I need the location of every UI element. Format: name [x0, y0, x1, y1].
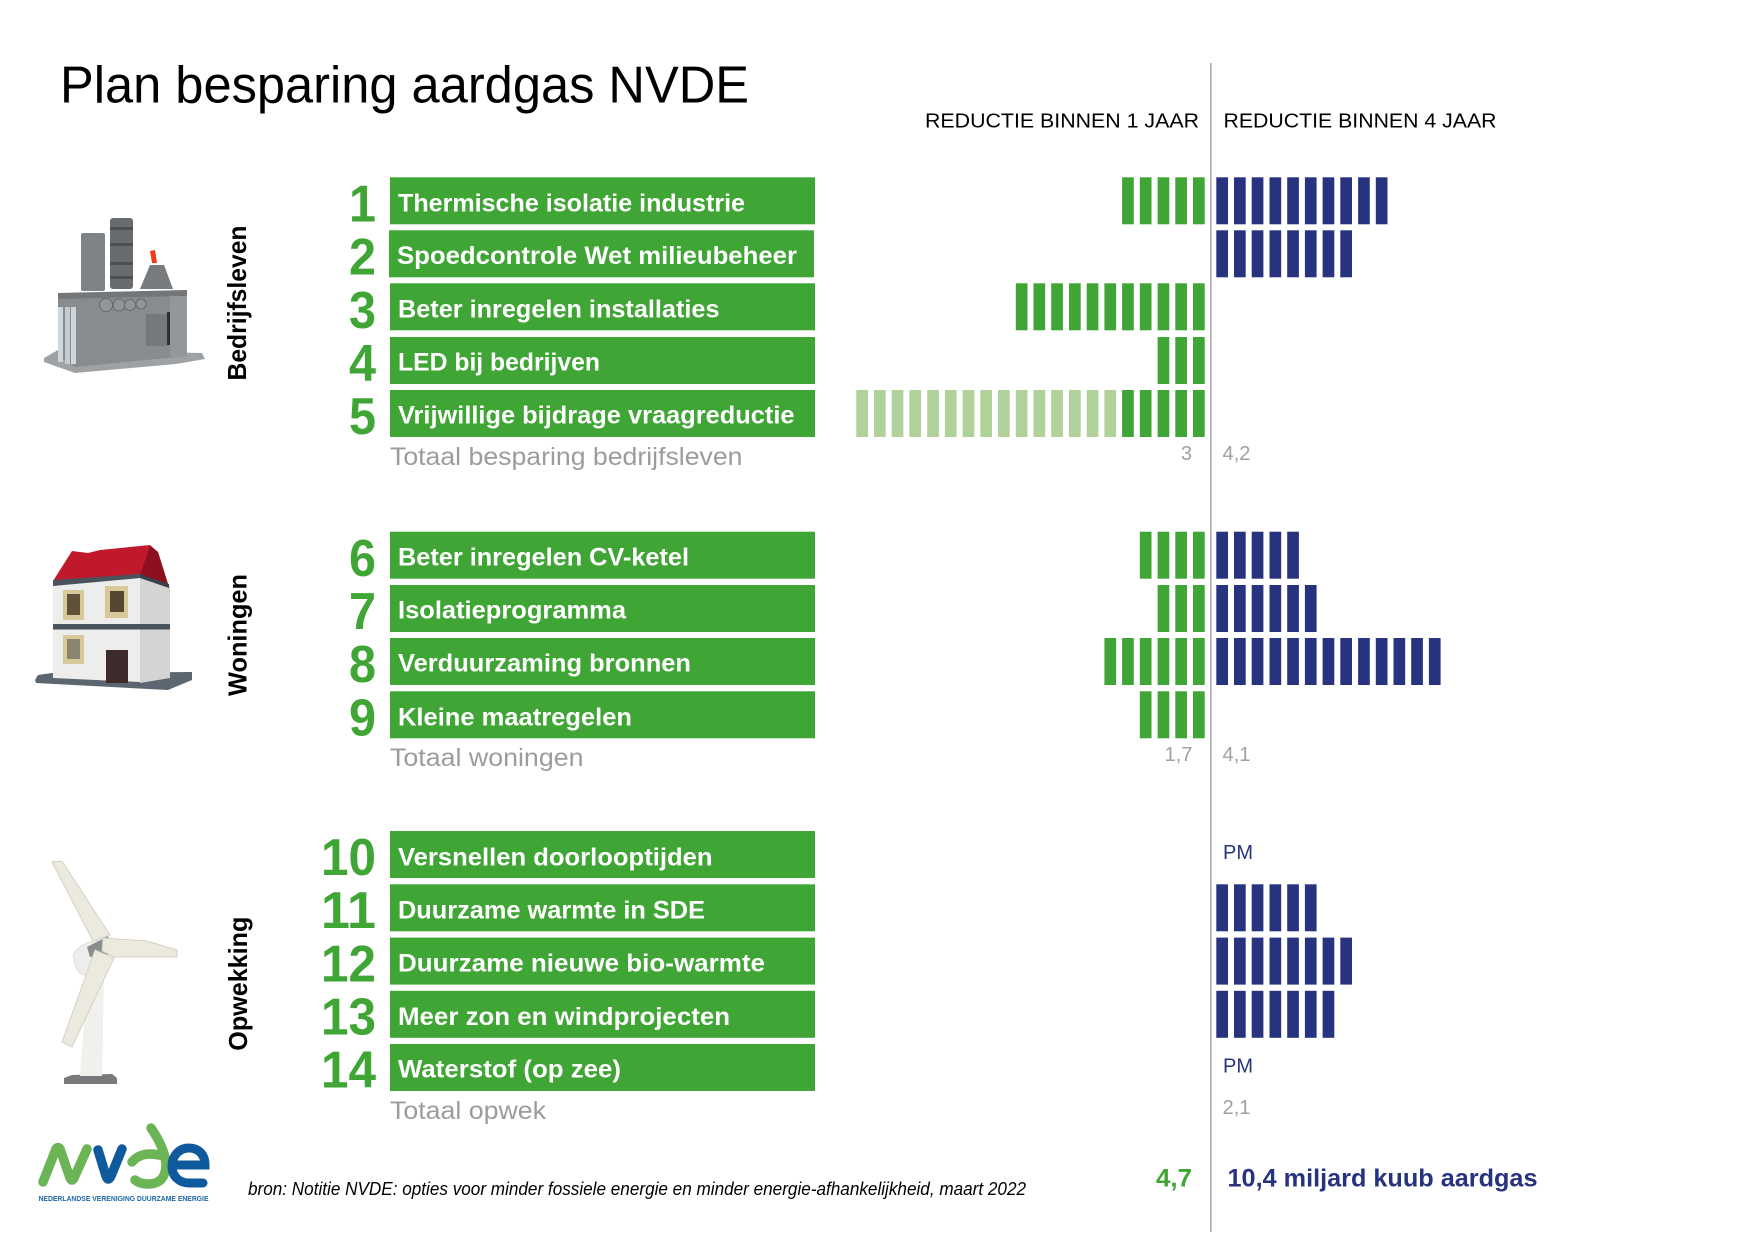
- row 8: 8: [349, 636, 376, 694]
- row 13: Meer zon en windprojecten: [398, 1003, 730, 1031]
- icon: lego wind turbine: [52, 861, 177, 1084]
- source note: bron: Notitie NVDE: opties voor minder fossiele energie en minder energie-afhankelijkheid, maart 2022: [248, 1179, 1026, 1199]
- row 9: [349, 690, 1205, 748]
- row 4: 4: [349, 335, 376, 393]
- row 9: Kleine maatregelen: [398, 704, 632, 732]
- row 6: 6: [349, 530, 376, 588]
- total: woningen: Totaal woningen: [390, 744, 584, 772]
- logo: NVDE: NEDERLANDSE VERENIGING DUURZAME ENERGIE: [38, 1194, 208, 1203]
- total: bedrijfsleven: [390, 443, 1250, 471]
- grand total: 1 jaar: 4,7: [1156, 1165, 1192, 1193]
- row 1: 1: [349, 176, 376, 234]
- section label: Opwekking: Opwekking: [223, 917, 253, 1051]
- row 4: [349, 335, 1205, 393]
- row 11: 11: [321, 882, 376, 940]
- row 7: 7: [349, 583, 376, 641]
- row 8: Verduurzaming bronnen: [398, 649, 691, 677]
- row 13: 13: [321, 988, 376, 1046]
- row 5: 5: [349, 388, 376, 446]
- row 12: Duurzame nieuwe bio-warmte: [398, 950, 765, 978]
- row 10: PM: [1223, 842, 1253, 864]
- icon: lego factory: [44, 218, 205, 373]
- row 11: Duurzame warmte in SDE: [398, 897, 705, 925]
- row 8: [349, 636, 1441, 694]
- row 10: Versnellen doorlooptijden: [398, 843, 712, 871]
- row 14: 14: [321, 1042, 376, 1100]
- row 3: Beter inregelen installaties: [398, 296, 720, 324]
- row 9: 9: [349, 690, 376, 748]
- row 6: [349, 530, 1299, 588]
- row 11: [321, 882, 1317, 940]
- row 6: Beter inregelen CV-ketel: [398, 543, 689, 571]
- total: woningen: 4,1: [1222, 744, 1250, 766]
- row 7: [349, 583, 1317, 641]
- section label: Bedrijfsleven: Bedrijfsleven: [222, 226, 252, 380]
- row 13: [321, 988, 1334, 1046]
- section label: Woningen: Woningen: [222, 574, 252, 696]
- row 14: PM: [1223, 1056, 1253, 1078]
- total: woningen: 1,7: [1164, 744, 1192, 766]
- total: opwek: [390, 1097, 1250, 1125]
- row 1: [349, 176, 1388, 234]
- title: Plan besparing aardgas NVDE: [60, 57, 749, 115]
- row 2: 2: [349, 229, 376, 287]
- row 2: Spoedcontrole Wet milieubeheer: [397, 242, 797, 270]
- grand total: 4 jaar: 10,4 miljard kuub aardgas: [1228, 1165, 1538, 1193]
- row 2: [349, 229, 1352, 287]
- total: opwek: Totaal opwek: [390, 1097, 547, 1125]
- row 12: [321, 935, 1352, 993]
- total: bedrijfsleven: 3: [1181, 443, 1192, 465]
- total: bedrijfsleven: 4,2: [1222, 443, 1250, 465]
- icon: lego house: [35, 545, 192, 690]
- total: opwek: 2,1: [1222, 1097, 1250, 1119]
- row 14: Waterstof (op zee): [398, 1056, 621, 1084]
- panel: bedrijfsleven: [44, 176, 1388, 471]
- row 12: 12: [321, 935, 376, 993]
- row 3: 3: [349, 282, 376, 340]
- total: bedrijfsleven: Totaal besparing bedrijfsleven: [390, 443, 742, 471]
- total: woningen: [390, 744, 1250, 772]
- row 4: LED bij bedrijven: [398, 348, 600, 376]
- row 10: [321, 829, 1253, 887]
- panel: opwekking: [52, 829, 1352, 1125]
- column heading: reductie binnen 4 jaar: REDUCTIE BINNEN 4 JAAR: [1224, 111, 1496, 133]
- row 5: Vrijwillige bijdrage vraagreductie: [398, 401, 795, 429]
- panel: woningen: [35, 530, 1441, 772]
- row 5: [349, 388, 1205, 446]
- row 1: Thermische isolatie industrie: [398, 190, 745, 218]
- row 3: [349, 282, 1205, 340]
- column heading: reductie binnen 1 jaar: REDUCTIE BINNEN 1 JAAR: [925, 111, 1199, 133]
- row 7: Isolatieprogramma: [398, 596, 627, 624]
- row 10: 10: [321, 829, 376, 887]
- central axis line: [1210, 63, 1212, 1232]
- logo: NVDE: [38, 1128, 208, 1203]
- row 14: [321, 1042, 1253, 1100]
